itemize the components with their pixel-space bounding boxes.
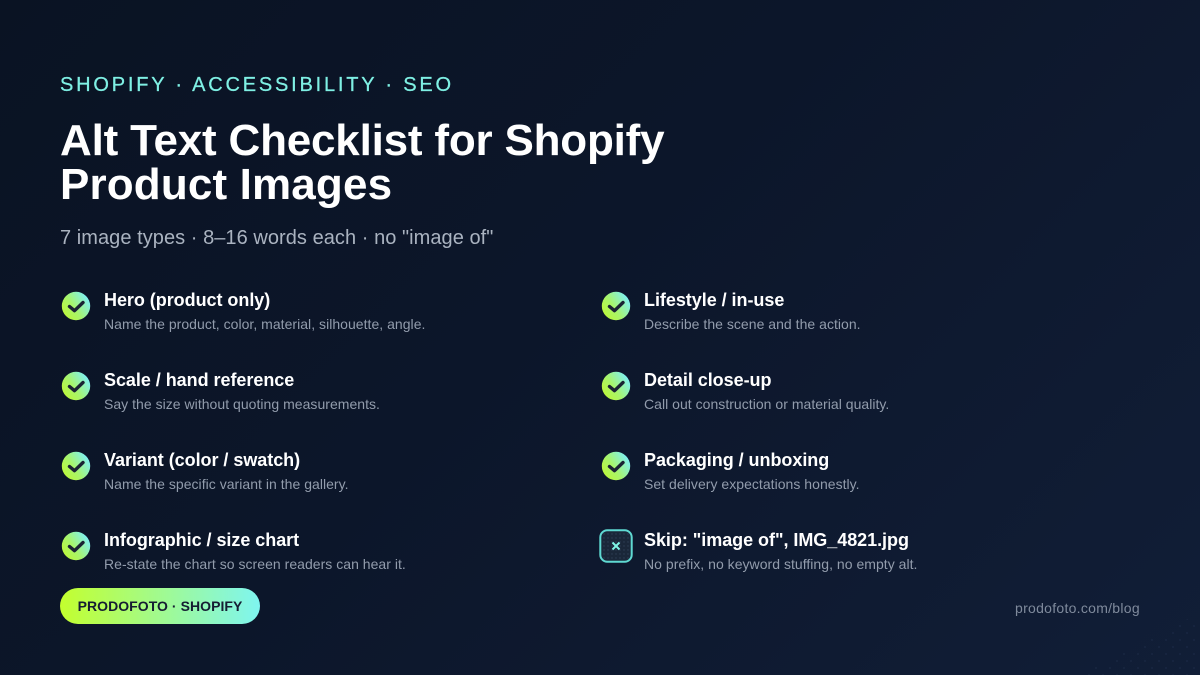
icon: cross	[599, 529, 633, 563]
checklist item: scale: Say the size without quoting measurements.	[104, 396, 380, 412]
icon: check	[62, 532, 90, 560]
checklist item: lifestyle: Describe the scene and the action.	[644, 316, 861, 332]
title: Product Images	[60, 160, 392, 209]
checklist item: skip	[599, 529, 917, 572]
checklist item: packaging: Set delivery expectations honestly.	[644, 476, 860, 492]
checklist item: skip: No prefix, no keyword stuffing, no empty alt.	[644, 556, 917, 572]
checklist item: hero	[62, 290, 425, 332]
checklist item: packaging: Packaging / unboxing	[644, 450, 829, 470]
brand pill: PRODOFOTO · SHOPIFY	[78, 598, 242, 614]
checklist item: scale	[62, 370, 380, 412]
checklist item: variant	[62, 450, 349, 492]
checklist item: lifestyle: Lifestyle / in-use	[644, 290, 784, 310]
title	[60, 116, 664, 209]
checklist item: skip: Skip: "image of", IMG_4821.jpg	[644, 530, 909, 550]
decorative dots	[1088, 619, 1194, 675]
icon: check	[602, 292, 630, 320]
brand pill	[60, 588, 260, 624]
subtitle: 7 image types · 8–16 words each · no "image of"	[60, 227, 493, 249]
checklist item: variant: Name the specific variant in the gallery.	[104, 476, 349, 492]
icon: check	[62, 452, 90, 480]
checklist item: variant: Variant (color / swatch)	[104, 450, 300, 470]
icon: check	[602, 452, 630, 480]
checklist item: lifestyle	[602, 290, 861, 332]
checklist item: infographic: Infographic / size chart	[104, 530, 299, 550]
title: Alt Text Checklist for Shopify	[60, 116, 664, 165]
checklist item: detail: Call out construction or material quality.	[644, 396, 889, 412]
icon: check	[602, 372, 630, 400]
checklist item: detail	[602, 370, 889, 412]
icon: check	[62, 372, 90, 400]
checklist item: scale: Scale / hand reference	[104, 370, 294, 390]
checklist item: hero: Hero (product only)	[104, 290, 270, 310]
checklist item: detail: Detail close-up	[644, 370, 771, 390]
checklist item: hero: Name the product, color, material, silhouette, angle.	[104, 316, 425, 332]
checklist item: infographic	[62, 530, 406, 572]
footer url: prodofoto.com/blog	[1015, 600, 1140, 616]
checklist item: infographic: Re-state the chart so screen readers can hear it.	[104, 556, 406, 572]
eyebrow: SHOPIFY · ACCESSIBILITY · SEO	[60, 74, 454, 96]
icon: check	[62, 292, 90, 320]
checklist item: packaging	[602, 450, 860, 492]
